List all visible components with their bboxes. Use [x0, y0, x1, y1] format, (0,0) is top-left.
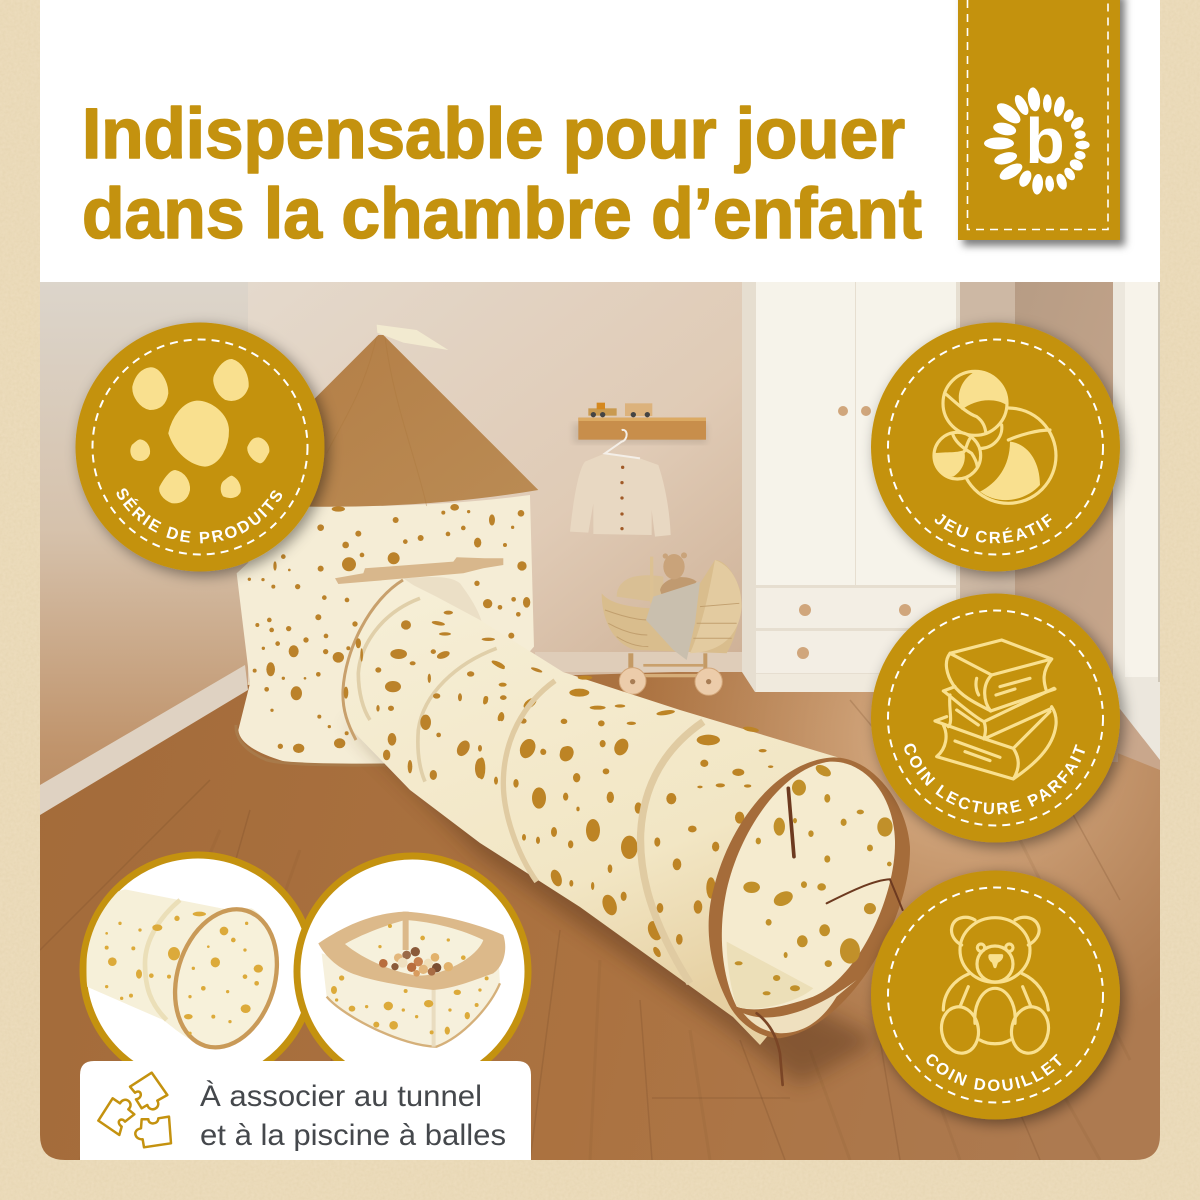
upper hoops	[358, 598, 497, 782]
icon: spots	[132, 360, 268, 502]
back wall	[248, 282, 748, 682]
card text: À associer au tunnel	[200, 1080, 482, 1113]
wardrobe	[742, 282, 960, 692]
tunnel	[343, 580, 910, 1085]
straps	[757, 788, 903, 1085]
badge label: COIN LECTURE PARFAIT	[904, 744, 1085, 814]
badge label: COIN DOUILLET	[926, 1054, 1062, 1091]
inner lining	[722, 762, 895, 1009]
ball pit body	[322, 950, 500, 1047]
outer brown ring	[709, 757, 910, 1038]
pennant	[377, 325, 448, 350]
door opening and roll	[335, 557, 503, 622]
cardigan	[570, 430, 671, 537]
pit spots	[331, 924, 489, 1035]
inset: ball pit product	[297, 856, 528, 1087]
first hoop near tent	[343, 580, 403, 740]
title: dans la chambre d’enfant	[82, 175, 922, 254]
tent	[236, 325, 538, 767]
tunnel hoops	[503, 681, 703, 983]
left wall	[40, 282, 248, 830]
floor	[40, 670, 1160, 1160]
photo: room with tent and tunnel	[40, 282, 1160, 1160]
baseboards	[40, 652, 750, 815]
card text	[200, 1080, 506, 1152]
window	[1113, 282, 1160, 760]
icon: balls	[934, 371, 1056, 503]
card text: et à la piscine à balles	[200, 1119, 506, 1152]
tent body	[237, 495, 534, 767]
badge: jeu créatif	[866, 318, 1133, 584]
title: Indispensable pour jouer	[82, 95, 905, 174]
inset: tunnel product	[80, 852, 306, 1061]
logo banner	[958, 0, 1120, 240]
tunnel shadow on floor	[345, 720, 880, 1085]
title	[82, 95, 922, 254]
tent base hem	[236, 725, 390, 765]
wall shelf, cardigan and doll pram	[570, 403, 742, 695]
shelf with toy trucks	[573, 403, 707, 443]
brand logo	[984, 87, 1090, 195]
tent roof	[308, 335, 538, 507]
badge label: SÉRIE DE PRODUITS	[116, 488, 282, 544]
badge: série de produits	[71, 318, 336, 584]
brand logo: b	[1025, 105, 1065, 177]
tunnel body	[352, 586, 840, 1045]
icon: books	[935, 640, 1056, 779]
right wall	[958, 282, 1160, 770]
badge: coin lecture parfait	[866, 589, 1133, 855]
balls	[379, 947, 453, 977]
icon: teddy bear	[938, 917, 1052, 1056]
inner spots	[735, 762, 893, 995]
icon: puzzle pieces	[98, 1073, 171, 1147]
tent spots	[248, 504, 530, 753]
ball pit rim	[318, 912, 505, 990]
badge label: JEU CRÉATIF	[934, 514, 1052, 544]
tunnel spots near tent	[344, 611, 570, 780]
tunnel body	[86, 890, 262, 1040]
info card	[80, 1061, 531, 1160]
badge: coin douillet	[867, 866, 1132, 1132]
header panel	[40, 0, 1160, 282]
pram	[602, 552, 742, 695]
tunnel spots main section	[478, 660, 773, 958]
tunnel mouth	[709, 757, 910, 1085]
